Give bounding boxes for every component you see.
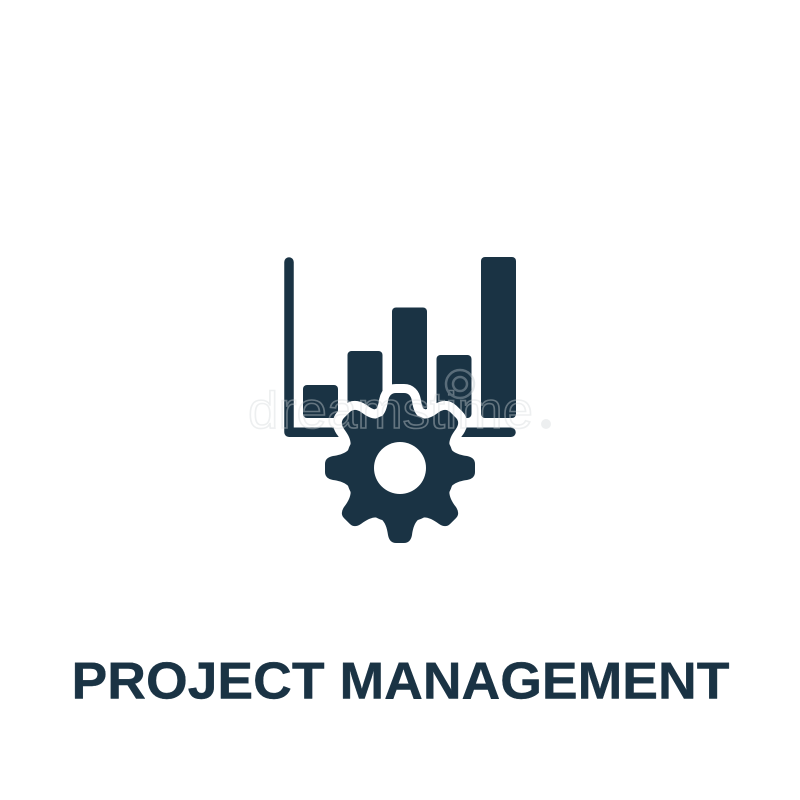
icon: bar chart with gear [289,257,516,543]
bar chart [303,257,516,418]
icon: gear [325,393,475,543]
chart axes [289,262,511,432]
watermark: dreamstime [248,382,533,440]
gear halo [325,393,475,523]
title: PROJECT MANAGEMENT [72,652,730,710]
